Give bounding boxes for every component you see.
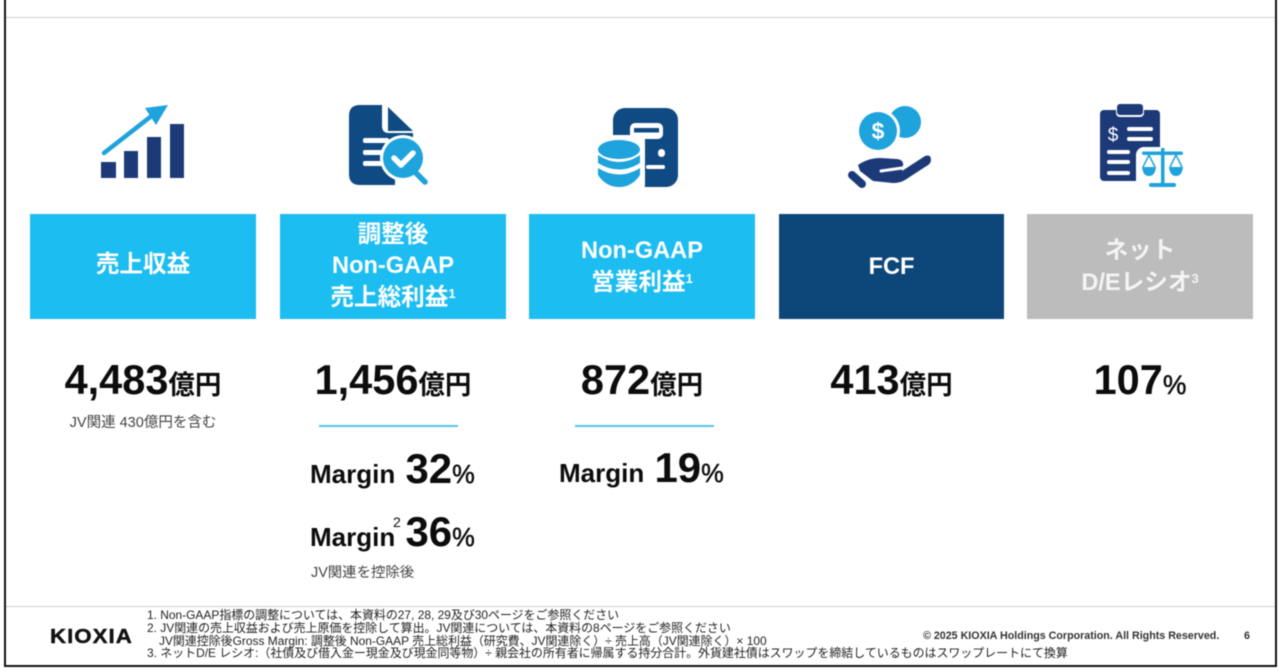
revenue note: JV関連 430億円を含む bbox=[70, 415, 216, 431]
panel: net D/E header: D/Eレシオ3 bbox=[1081, 270, 1199, 296]
icon: rising bar chart bbox=[100, 104, 185, 179]
page number: 6 bbox=[1244, 630, 1250, 642]
JV note: JV関連を控除後 bbox=[311, 565, 414, 581]
icon: hand with coins bbox=[847, 105, 932, 189]
footnotes: JV関連控除後Gross Margin: 調整後 Non-GAAP 売上総利益（研究費、JV関連除く）÷ 売上高（JV関連除く）× 100 bbox=[159, 634, 767, 648]
copyright: © 2025 KIOXIA Holdings Corporation. All Rights Reserved. bbox=[923, 630, 1219, 642]
panel: adjusted gross profit header: 売上総利益1 bbox=[330, 285, 456, 311]
panel: net D/E header bbox=[1027, 214, 1253, 319]
footer divider bbox=[6, 606, 1275, 607]
gross margin 36 excluding JV: Margin 36% bbox=[310, 508, 475, 555]
panel: operating profit header bbox=[529, 214, 755, 319]
logo: KIOXIA: KIOXIA bbox=[50, 626, 133, 648]
panel: revenue header bbox=[30, 214, 256, 319]
footnotes: 3. ネットD/E レシオ:（社債及び借入金ー現金及び現金同等物）÷ 親会社の所有者に帰属する持分合計。外貨建社債はスワップを締結しているものはスワップレートにて換算 bbox=[147, 646, 1068, 660]
icon: document with magnifier bbox=[348, 104, 428, 186]
icon: clipboard with scales bbox=[1099, 103, 1184, 188]
panel: adjusted gross profit header bbox=[280, 214, 506, 319]
footnotes: 1. Non-GAAP指標の調整については、本資料の27, 28, 29及び30ページをご参照ください bbox=[147, 608, 619, 622]
panel: net D/E header: ネット bbox=[1105, 238, 1175, 264]
panel: revenue header: 売上収益 bbox=[96, 252, 190, 278]
icon: clipboard with scales: $ bbox=[1108, 125, 1119, 146]
footnotes: 2. JV関連の売上収益および売上原価を控除して算出。JV関連については、本資料の8ページをご参照ください bbox=[147, 621, 731, 635]
panel: adjusted gross profit header: 調整後 bbox=[358, 222, 428, 248]
panel: FCF header bbox=[779, 214, 1004, 319]
footnotes bbox=[146, 608, 1068, 660]
FCF value: 413億円 bbox=[830, 356, 953, 403]
operating profit value: 872億円 bbox=[581, 356, 703, 403]
icon: database coins and ledger bbox=[597, 107, 679, 188]
panel: adjusted gross profit header: Non-GAAP bbox=[332, 253, 454, 279]
top divider bbox=[6, 17, 1275, 18]
revenue value: 4,483億円 bbox=[65, 356, 221, 403]
operating margin: Margin 19% bbox=[559, 444, 724, 491]
gross margin 32: Margin 32% bbox=[310, 445, 475, 492]
gross profit value: 1,456億円 bbox=[315, 356, 471, 403]
panel: operating profit header: 営業利益1 bbox=[591, 270, 693, 296]
icon: hand with coins: $ bbox=[872, 118, 885, 144]
gross margin 36 excluding JV: 2 bbox=[393, 514, 401, 530]
net D/E value: 107% bbox=[1094, 356, 1186, 403]
panel: FCF header: FCF bbox=[869, 254, 914, 280]
panel: operating profit header: Non-GAAP bbox=[581, 238, 703, 264]
